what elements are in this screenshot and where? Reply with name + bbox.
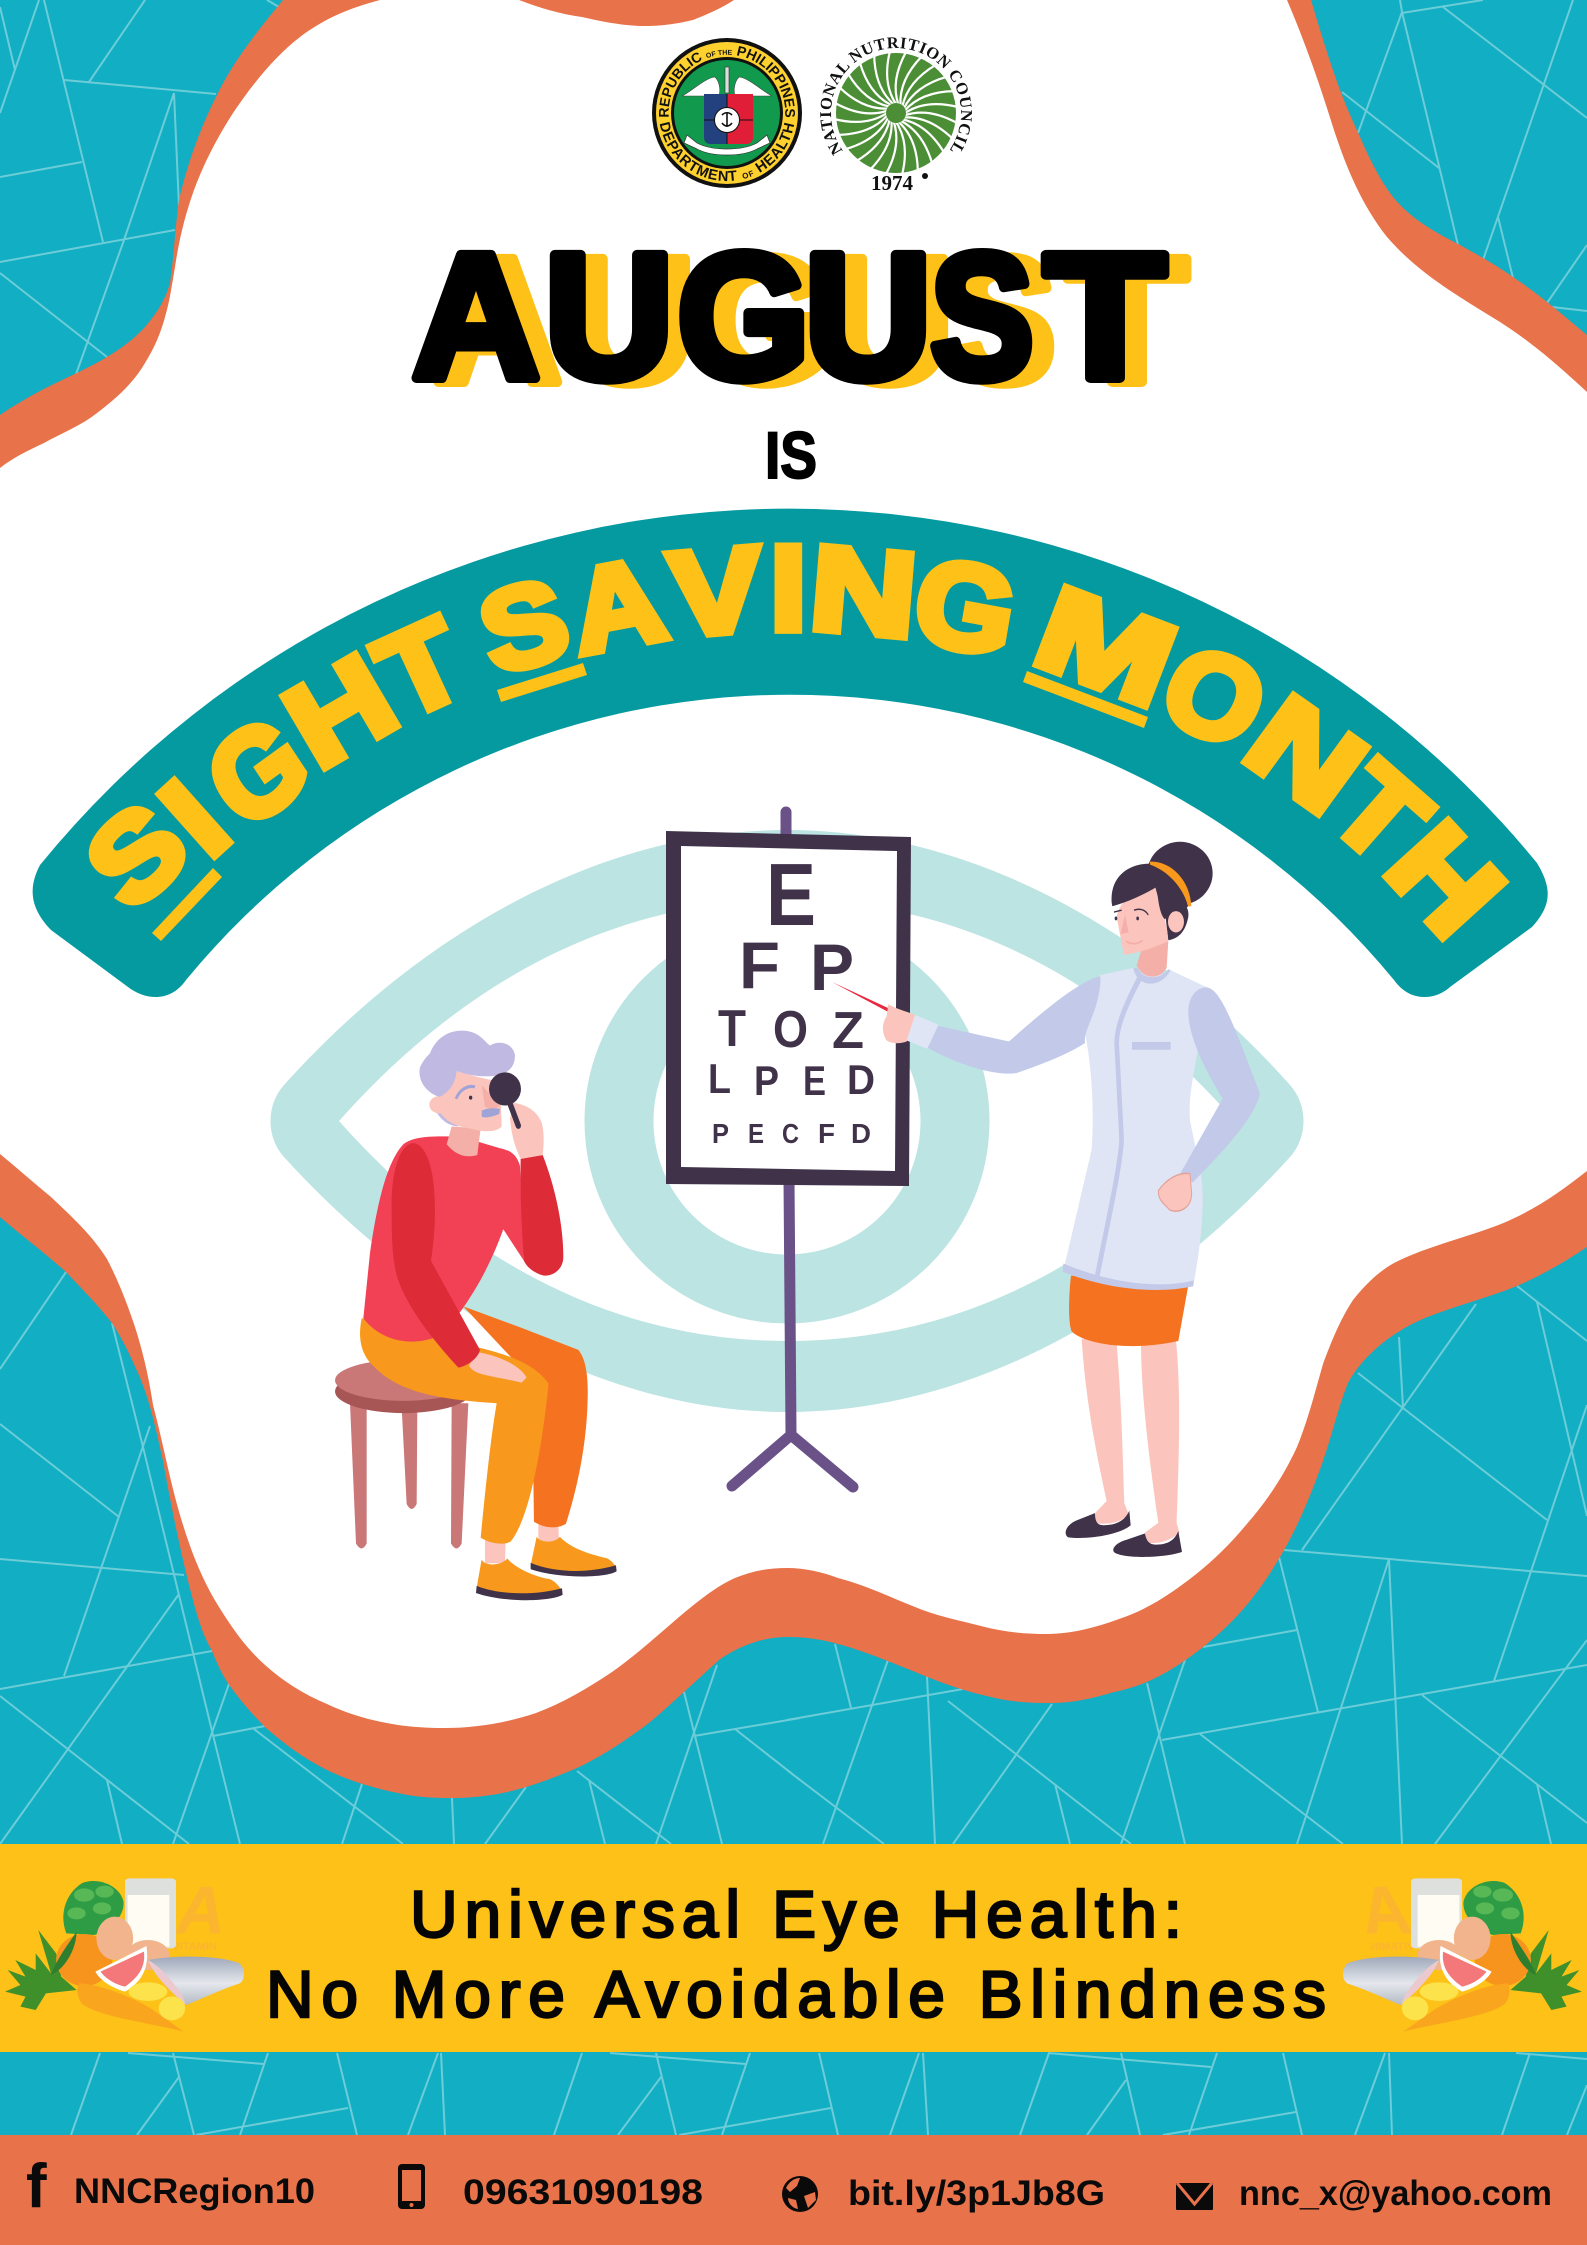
stool	[335, 1360, 472, 1548]
illustration: seated man on stool	[335, 1031, 617, 1600]
banner slogan text: No More Avoidable Blindness	[266, 1957, 1326, 2031]
eye chart on stand: E	[766, 845, 816, 944]
arch title: SIGHT SAVING MONTH: S	[466, 554, 582, 699]
title: AUGUST: S	[930, 216, 1034, 416]
banner slogan text	[266, 1877, 1326, 2031]
logo: National Nutrition Council: NATIONAL NUTRITION COUNCIL	[820, 37, 972, 156]
arch title: SIGHT SAVING MONTH: N	[806, 521, 921, 663]
coat	[1063, 968, 1207, 1290]
eye chart on stand: E	[748, 1118, 764, 1149]
eye chart on stand: O	[773, 1001, 808, 1059]
near arm	[392, 1143, 480, 1368]
arch title: SIGHT SAVING MONTH	[62, 521, 1528, 961]
title: AUGUST shadow: G	[699, 220, 832, 420]
eye chart on stand: E	[803, 1057, 826, 1104]
legs	[1082, 1339, 1179, 1543]
hand on knee	[469, 1352, 527, 1383]
eye chart on stand: F	[818, 1118, 835, 1149]
eye chart on stand: P	[754, 1057, 779, 1104]
white central blob	[0, 0, 1587, 1728]
arch title: SIGHT SAVING MONTH: I	[137, 757, 252, 880]
head	[419, 1031, 515, 1131]
eye chart on stand: L	[708, 1055, 731, 1102]
shoes	[1066, 1511, 1182, 1557]
illustration: female doctor	[883, 842, 1260, 1557]
skirt	[1069, 1276, 1188, 1346]
title: AUGUST shadow	[434, 220, 1188, 420]
eye chart on stand: P	[712, 1118, 729, 1149]
near leg and shoe	[360, 1318, 563, 1600]
eye chart on stand: D	[851, 1118, 871, 1149]
website: bit.ly/3p1Jb8G	[848, 2174, 1105, 2213]
icon: globe	[782, 2176, 818, 2212]
icon: vitamin A foods left: A	[174, 1872, 225, 1948]
eye chart on stand: D	[847, 1056, 875, 1103]
logo: Department of Health seal	[652, 38, 802, 188]
torso	[363, 1136, 524, 1342]
title: AUGUST: T	[1044, 216, 1166, 416]
title: AUGUST	[412, 216, 1166, 416]
icon: vitamin A foods right: A	[1362, 1872, 1413, 1948]
title: AUGUST: A	[412, 216, 540, 416]
yellow slogan banner	[0, 1844, 1587, 2052]
title: AUGUST shadow: A	[434, 220, 562, 420]
logo: Department of Health seal: DEPARTMENT OF HEALTH	[660, 122, 794, 182]
title: AUGUST: U	[544, 216, 674, 416]
arch title: SIGHT SAVING MONTH: G	[184, 690, 330, 854]
facebook handle: NNCRegion10	[74, 2172, 315, 2211]
footer contact bar	[0, 2135, 1587, 2245]
icon: vitamin A foods right	[1343, 1872, 1582, 2032]
arch title: SIGHT SAVING MONTH: O	[1143, 619, 1285, 775]
icon: mail	[1176, 2183, 1213, 2210]
icon: vitamin A foods right: VITAMIN	[1370, 1941, 1415, 1953]
arch title: SIGHT SAVING MONTH: I	[770, 522, 806, 656]
far leg and shoe	[463, 1306, 617, 1576]
arch title: SIGHT SAVING MONTH: T	[359, 593, 484, 744]
title: AUGUST shadow: U	[826, 220, 954, 420]
arch title: SIGHT SAVING MONTH: H	[1362, 798, 1528, 961]
phone number: 09631090198	[463, 2173, 703, 2212]
head	[1112, 842, 1213, 955]
arch title: SIGHT SAVING MONTH: S	[62, 777, 211, 934]
eye chart on stand: C	[782, 1118, 799, 1149]
logo: National Nutrition Council: 1974	[871, 171, 914, 195]
far arm	[520, 1155, 563, 1276]
eye chart on stand	[666, 812, 911, 1487]
banner slogan text: Universal Eye Health:	[410, 1877, 1182, 1951]
hand-on-hip arm	[1158, 987, 1260, 1211]
logo: Department of Health seal: REPUBLIC OF THE PHILIPPINES	[659, 46, 795, 118]
neck	[447, 1126, 481, 1156]
icon: phone	[398, 2164, 425, 2209]
title: AUGUST shadow: U	[566, 220, 696, 420]
arch title: SIGHT SAVING MONTH: N	[1223, 670, 1389, 839]
pointing arm	[883, 976, 1101, 1074]
teal arch banner	[33, 509, 1548, 997]
eye chart on stand: F	[739, 928, 780, 1002]
title: AUGUST shadow: T	[1066, 220, 1188, 420]
collar	[1133, 968, 1171, 984]
email: nnc_x@yahoo.com	[1239, 2174, 1552, 2213]
heading: IS: IS	[765, 418, 817, 492]
hand with occluder	[489, 1072, 544, 1159]
neck	[1137, 941, 1168, 977]
title: AUGUST: G	[677, 216, 810, 416]
icon: vitamin A foods left: VITAMIN	[172, 1941, 217, 1953]
icon: vitamin A foods left	[5, 1872, 244, 2032]
icon: facebook: f	[26, 2152, 47, 2221]
arch title: SIGHT SAVING MONTH: G	[905, 532, 1025, 683]
arch title: SIGHT SAVING MONTH: V	[665, 522, 767, 662]
eye chart on stand: Z	[832, 1002, 864, 1060]
pointer stick	[832, 982, 907, 1022]
eye illustration	[270, 830, 1304, 1412]
eye chart on stand: T	[718, 1000, 746, 1058]
arch title: SIGHT SAVING MONTH: H	[264, 629, 417, 794]
eye chart on stand: P	[810, 930, 854, 1004]
arch title: SIGHT SAVING MONTH: T	[1307, 738, 1452, 888]
title: AUGUST: U	[804, 216, 932, 416]
arch title: SIGHT SAVING MONTH: M	[1019, 561, 1192, 733]
arch title: SIGHT SAVING MONTH: A	[560, 533, 675, 680]
orange top crest	[519, 0, 734, 26]
title: AUGUST shadow: S	[952, 220, 1056, 420]
